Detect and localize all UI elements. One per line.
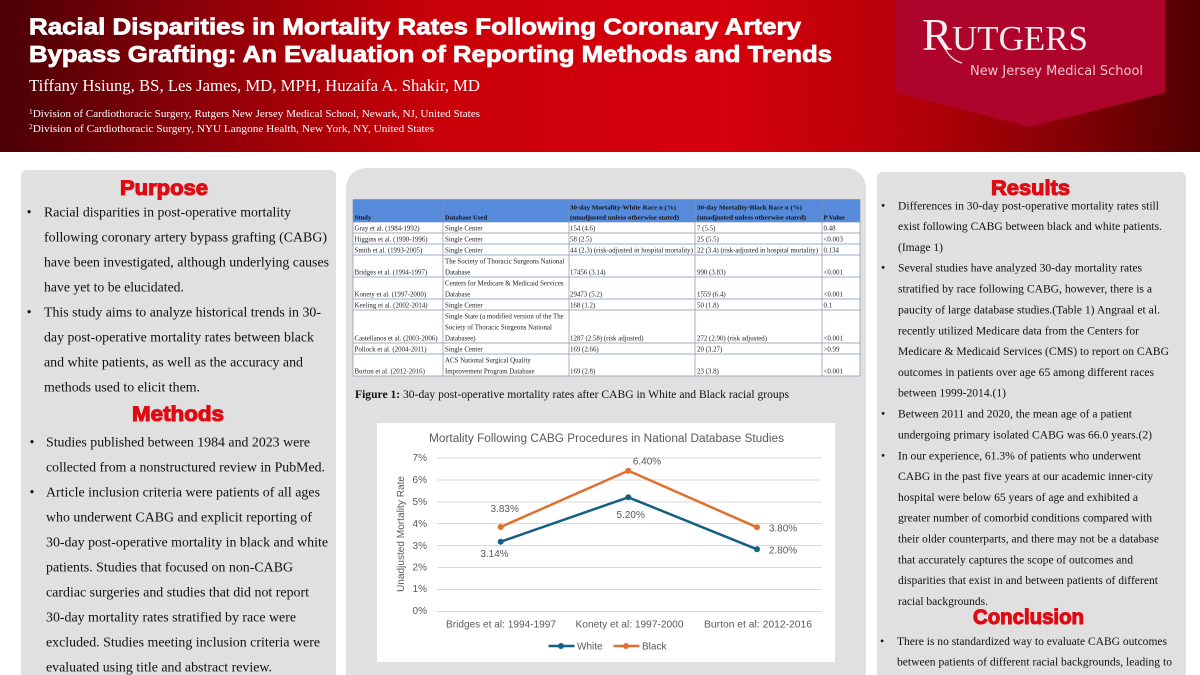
table body rows: Single Center — [445, 236, 483, 244]
affiliations: 2 — [29, 123, 33, 131]
table body rows: <0.001 — [824, 368, 843, 376]
x axis labels: Konety et al: 1997-2000 — [576, 620, 684, 630]
results text: recently utilized Medicare data from the Centers for — [898, 323, 1139, 337]
panel: results and conclusion — [877, 172, 1186, 675]
results text: CABG in the past five years at our academic inner-city — [898, 469, 1153, 483]
table body rows: 0.48 — [824, 226, 836, 232]
series: black — [498, 468, 760, 530]
affiliations: Division of Cardiothoracic Surgery, NYU Langone Health, New York, NY, United States — [33, 124, 434, 135]
results text: outcomes in patients over age 65 among different races — [898, 365, 1154, 379]
x axis labels: Burton et al: 2012-2016 — [704, 620, 812, 630]
authors: Tiffany Hsiung, BS, Les James, MD, MPH, Huzaifa A. Shakir, MD — [29, 76, 480, 95]
table header row: 30-day Mortality-White Race n (%) — [570, 204, 676, 212]
panel: table and chart — [346, 168, 866, 675]
results text: • — [881, 261, 885, 275]
results text: hospital were below 65 years of age and exhibited a — [898, 490, 1139, 504]
title: Bypass Grafting: An Evaluation of Reporting Methods and Trends — [29, 41, 832, 67]
table body rows: Single Center — [445, 302, 483, 310]
table body rows: 169 (2.66) — [570, 346, 599, 354]
table header row: P Value — [824, 214, 845, 222]
logo: Rutgers shield: New Jersey Medical School — [970, 64, 1143, 79]
table body rows: 50 (1.8) — [697, 302, 719, 310]
results text: that accurately captures the scope of outcomes and — [898, 552, 1133, 566]
table body rows: 58 (2.5) — [570, 236, 592, 244]
purpose text: This study aims to analyze historical trends in 30- — [44, 304, 322, 320]
table body rows: The Society of Thoracic Surgeons National — [445, 258, 564, 266]
legend: Black — [642, 642, 667, 652]
methods text: 30-day mortality rates stratified by race were — [46, 610, 296, 624]
table body rows: Konety et al. (1997-2000) — [354, 292, 426, 298]
table body rows: 990 (3.83) — [697, 270, 726, 276]
table body rows: 7 (5.5) — [697, 226, 715, 232]
table body rows: Database — [445, 292, 470, 298]
results text: Differences in 30-day post-operative mortality rates still — [898, 198, 1160, 212]
table body rows: Castellanos et al. (2003-2006) — [354, 336, 438, 342]
y axis title: Unadjusted Mortality Rate — [395, 476, 407, 592]
purpose text — [27, 204, 329, 394]
conclusion text: • — [880, 634, 884, 648]
purpose text: following coronary artery bypass grafting (CABG) — [44, 230, 327, 244]
legend: White — [577, 642, 603, 652]
heading: methods: Methods — [132, 403, 224, 426]
results text: In our experience, 61.3% of patients who underwent — [898, 448, 1142, 462]
results text: (Image 1) — [898, 240, 943, 254]
table body rows: 0.1 — [824, 302, 833, 310]
methods text: 30-day post-operative mortality in black and white — [46, 534, 328, 550]
table body rows: 44 (2.3) (risk-adjusted in hospital mortality) — [570, 248, 693, 254]
results text: racial backgrounds. — [898, 594, 988, 608]
y axis labels: 6% — [413, 475, 427, 486]
affiliations: Division of Cardiothoracic Surgery, Rutgers New Jersey Medical School, Newark, NJ, United States — [33, 109, 480, 120]
results text: disparities that exist in and between patients of different — [898, 573, 1159, 587]
table body rows: Single Center — [445, 346, 483, 354]
table body rows: Gray et al. (1984-1992) — [354, 226, 420, 232]
results text: paucity of large database studies.(Table 1) Angraal et al. — [898, 302, 1160, 316]
table body rows: Bridges et al. (1994-1997) — [354, 270, 427, 276]
methods text: evaluated using title and abstract review. — [46, 660, 272, 674]
data labels: 5.20% — [617, 510, 645, 521]
purpose text: Racial disparities in post-operative mortality — [44, 204, 291, 220]
table body rows: 0.134 — [824, 248, 840, 254]
results text: between 1999-2014.(1) — [898, 386, 1006, 400]
methods text: Article inclusion criteria were patients of all ages — [46, 484, 320, 500]
title — [29, 14, 832, 67]
results text: Medicare & Medicaid Services (CMS) to report on CABG — [898, 344, 1169, 358]
table body rows: 272 (2.90) (risk adjusted) — [697, 336, 767, 342]
results text: • — [881, 448, 885, 462]
table body rows: >0.99 — [824, 346, 840, 354]
table body rows: <0.001 — [824, 336, 843, 342]
table body rows: 168 (1.2) — [570, 302, 595, 310]
purpose text: • — [27, 204, 31, 220]
table body rows: 25 (5.5) — [697, 236, 719, 244]
table body rows: ACS National Surgical Quality — [445, 358, 531, 364]
table body rows: Keeling et al. (2002-2014) — [354, 302, 428, 310]
table body rows: Databasee) — [445, 336, 476, 342]
results text: exist following CABG between black and white patients. — [898, 219, 1162, 233]
table header row: 30-day Mortality-Black Race n (%) — [697, 204, 802, 212]
results text — [881, 198, 1169, 608]
table body rows: 22 (3.4) (risk-adjusted in hospital mortality) — [697, 248, 818, 254]
purpose text: and white patients, as well as the accuracy and — [44, 354, 303, 370]
conclusion text — [880, 634, 1172, 669]
heading: results: Results — [991, 177, 1070, 200]
table body rows: 1559 (6.4) — [697, 292, 726, 298]
table body rows: Burton et al. (2012-2016) — [354, 368, 425, 376]
table header row: Study — [354, 214, 372, 222]
heading: conclusion: Conclusion — [973, 606, 1084, 629]
table body rows — [354, 226, 843, 376]
line chart — [377, 423, 835, 662]
data labels: 2.80% — [769, 546, 797, 556]
conclusion text: There is no standardized way to evaluate CABG outcomes — [897, 634, 1167, 648]
methods text: excluded. Studies meeting inclusion criteria were — [46, 634, 320, 650]
logo: Rutgers shield: RUTGERS — [922, 10, 1088, 60]
figure caption: Figure 1: 30-day post-operative mortality rates after CABG in White and Black racial groups — [355, 389, 790, 401]
table body rows: Single Center — [445, 226, 483, 232]
panel: purpose and methods — [21, 170, 336, 675]
results text: their older counterparts, and there may not be a database — [898, 532, 1159, 546]
logo: Rutgers shield — [896, 0, 1165, 127]
x axis labels — [446, 620, 812, 630]
table body rows: Higgins et al. (1990-1996) — [354, 236, 428, 244]
table body rows: <0.001 — [824, 292, 843, 298]
y axis labels: 7% — [413, 453, 427, 464]
methods text: • — [30, 434, 34, 450]
table body rows: Single State (a modified version of the The — [445, 314, 564, 320]
table header row: (unadjusted unless otherwise stated) — [570, 214, 679, 222]
results text: Several studies have analyzed 30-day mortality rates — [898, 261, 1142, 275]
y axis labels: 3% — [413, 541, 427, 552]
affiliations: 1 — [29, 108, 33, 116]
methods text: patients. Studies that focused on non-CABG — [46, 560, 293, 574]
results text: undergoing primary isolated CABG was 66.0 years.(2) — [898, 427, 1152, 441]
table body rows: 169 (2.8) — [570, 368, 595, 376]
table body rows: 23 (3.8) — [697, 368, 719, 376]
table body rows: Improvement Program Database — [445, 368, 535, 376]
methods text — [30, 434, 328, 674]
series: white — [498, 494, 760, 552]
data labels: 6.40% — [633, 456, 661, 468]
table header row — [354, 204, 845, 222]
results text: greater number of comorbid conditions compared with — [898, 511, 1152, 525]
y axis labels: 5% — [413, 497, 427, 508]
data labels: 3.14% — [480, 549, 509, 560]
title: Racial Disparities in Mortality Rates Following Coronary Artery — [29, 14, 801, 40]
data labels: 3.80% — [769, 524, 797, 534]
methods text: cardiac surgeries and studies that did not report — [46, 584, 309, 600]
x axis labels: Bridges et al: 1994-1997 — [446, 620, 556, 630]
y axis labels: 0% — [413, 606, 427, 617]
table of studies — [353, 200, 860, 376]
heading: purpose: Purpose — [120, 177, 208, 200]
conclusion text: between patients of different racial backgrounds, leading to — [897, 655, 1172, 669]
data labels — [480, 456, 797, 560]
legend — [548, 642, 667, 652]
table body rows: Pollock et al. (2004-2011) — [354, 346, 427, 354]
results text: • — [881, 198, 885, 212]
y axis labels: 2% — [413, 562, 427, 574]
results text: stratified by race following CABG, however, there is a — [898, 282, 1153, 296]
table body rows: Centers for Medicare & Medicaid Services — [445, 280, 564, 288]
y axis labels — [413, 453, 427, 617]
y axis labels: 4% — [413, 519, 427, 530]
table header row: (unadjusted unless otherwise stated) — [697, 214, 806, 222]
methods text: collected from a nonstructured review in PubMed. — [46, 460, 325, 474]
purpose text: • — [27, 304, 31, 320]
chart title: Mortality Following CABG Procedures in National Database Studies — [429, 433, 784, 445]
table body rows: 17456 (3.14) — [570, 270, 606, 276]
table body rows: 29473 (5.2) — [570, 292, 602, 298]
table body rows: <0.001 — [824, 270, 843, 276]
affiliations — [29, 108, 480, 135]
results text: Between 2011 and 2020, the mean age of a patient — [898, 406, 1133, 420]
table header row: Database Used — [445, 214, 487, 222]
table body rows: 20 (3.27) — [697, 346, 722, 354]
purpose text: methods used to elicit them. — [44, 380, 200, 394]
table body rows: Society of Thoracic Surgeons National — [445, 324, 552, 332]
table body rows: Database — [445, 270, 470, 276]
table body rows: 154 (4.6) — [570, 226, 595, 232]
y axis labels: 1% — [413, 584, 427, 595]
results text: • — [881, 406, 885, 420]
header banner — [0, 0, 1200, 152]
purpose text: have yet to be elucidated. — [44, 280, 184, 294]
table body rows: Smith et al. (1993-2005) — [354, 248, 422, 254]
purpose text: day post-operative mortality rates between black — [44, 330, 314, 344]
table body rows: Single Center — [445, 248, 483, 254]
table body rows: 1287 (2.58) (risk adjusted) — [570, 336, 644, 342]
table body rows: <0.003 — [824, 236, 843, 244]
data labels: 3.83% — [491, 504, 519, 515]
methods text: who underwent CABG and explicit reporting of — [46, 510, 313, 524]
purpose text: have been investigated, although underlying causes — [44, 254, 329, 270]
methods text: • — [30, 484, 34, 500]
methods text: Studies published between 1984 and 2023 were — [46, 434, 310, 450]
